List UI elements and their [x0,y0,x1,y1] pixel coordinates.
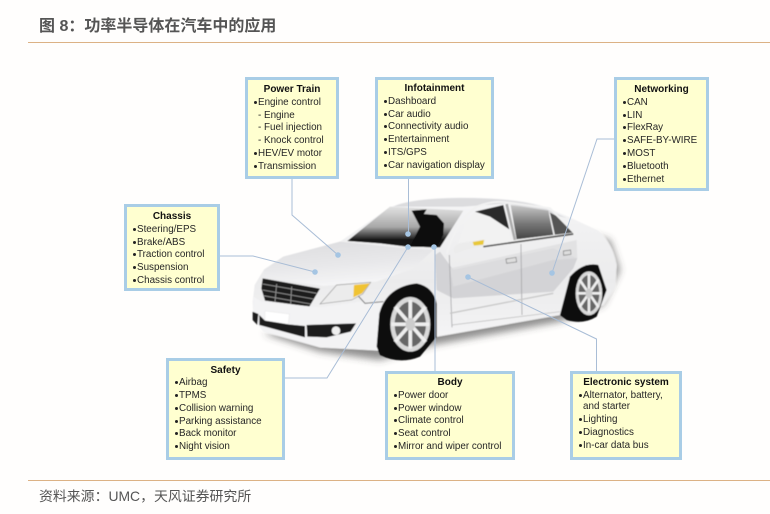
panel: networking: Bluetooth [627,161,669,172]
panel: infotainment: Connectivity audio [388,121,468,132]
roof highlight [393,198,567,218]
panel: power train: - Knock control [258,135,324,146]
panel: networking: LIN [627,110,642,121]
side reflection [435,248,577,298]
headlight [320,282,371,304]
grille [261,278,320,307]
car [253,197,620,360]
panel: power train: Power Train [264,84,320,95]
panel: chassis: Chassis control [137,275,204,286]
panel: chassis: Brake/ABS [137,237,185,248]
panel: electronic system [570,371,682,460]
panel: safety: Parking assistance [179,416,262,427]
driver silhouette [410,209,444,247]
panel: body: Body [438,377,462,388]
panel: electronic system: and starter [583,401,630,412]
panel: power train: Engine control [258,97,321,108]
panel: power train: HEV/EV motor [258,148,322,159]
front side window [457,205,511,246]
door handles [506,257,517,263]
panel: infotainment: Car audio [388,109,431,120]
connector dots [312,231,555,280]
windshield [347,207,463,247]
panel: body: Seat control [398,428,451,439]
panel: body: Climate control [398,415,464,426]
panel: chassis: Suspension [137,262,188,273]
window trim [447,202,575,254]
panel: safety: Airbag [179,377,207,388]
car body [253,197,617,351]
panel: safety: Night vision [179,441,230,452]
panel: networking: CAN [627,97,648,108]
panel: body: Power door [398,390,448,401]
panel: networking: SAFE-BY-WIRE [627,135,697,146]
panel: chassis: Steering/EPS [137,224,196,235]
panel: electronic system: Lighting [583,414,617,425]
source note: 资料来源：UMC，天风证券研究所 [39,488,251,504]
panel: power train [245,77,339,179]
panel: electronic system: Alternator, battery, [583,390,663,401]
hood [264,242,433,286]
title: 图 8：功率半导体在汽车中的应用 [39,18,276,35]
panel: infotainment: Dashboard [388,96,436,107]
panel: infotainment: Car navigation display [388,160,485,171]
mirror [453,239,485,254]
car shadow [263,233,620,360]
panel: infotainment: ITS/GPS [388,147,427,158]
panel: safety: Collision warning [179,403,253,414]
panel: chassis: Traction control [137,249,204,260]
panel: safety: Back monitor [179,428,236,439]
panel: networking [614,77,709,191]
panel: networking: FlexRay [627,122,663,133]
panel: power train: - Engine [258,110,295,121]
panel: electronic system: Electronic system [583,377,669,388]
connector lines [219,139,615,378]
license plate [265,311,289,324]
panel: body: Mirror and wiper control [398,441,501,452]
panel: safety [166,358,285,460]
panel: networking: Networking [634,84,689,95]
bumper [253,297,383,349]
panel: networking: Ethernet [627,174,664,185]
lower intake [253,312,305,337]
panel: body: Power window [398,403,461,414]
panel: safety: TPMS [179,390,206,401]
rear side window [511,205,553,239]
panel: infotainment: Infotainment [404,83,464,94]
rear wheel [560,264,607,322]
panel: infotainment: Entertainment [388,134,449,145]
front wheel [377,283,437,360]
panel: electronic system: Diagnostics [583,427,634,438]
panel: safety: Safety [210,364,240,376]
door seams [449,244,522,327]
panel: chassis [124,204,220,291]
panel: body [385,371,515,460]
fog lamp [307,323,356,337]
panel: power train: - Fuel injection [258,122,322,133]
panel: power train: Transmission [258,161,316,172]
panel: electronic system: In-car data bus [583,440,649,451]
panel: networking: MOST [627,148,655,159]
panel: chassis: Chassis [153,211,191,222]
panel: infotainment [375,77,494,179]
